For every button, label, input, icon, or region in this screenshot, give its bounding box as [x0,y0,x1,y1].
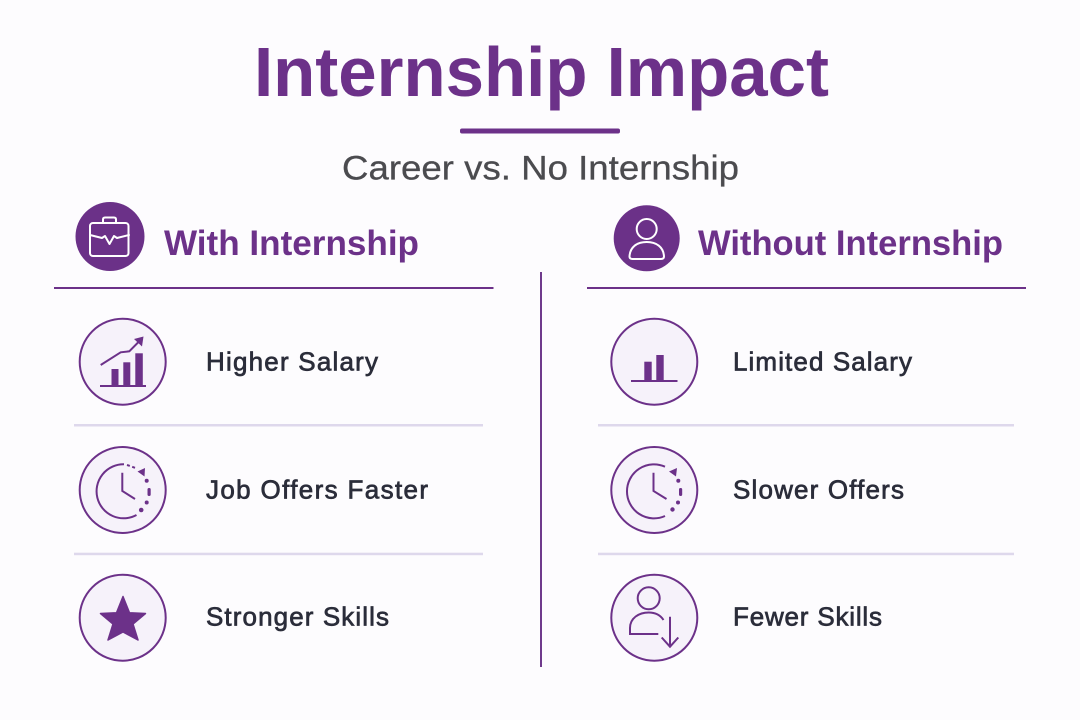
icon: briefcase [76,202,144,271]
label: slower offers: Slower Offers [733,474,904,504]
panel: with internship [54,202,494,661]
row: higher salary [80,319,378,405]
label: job offers faster: Job Offers Faster [206,474,428,504]
row: job offers faster [80,447,428,533]
row: limited salary [611,319,912,405]
icon: clock with dotted arrow [80,447,166,533]
row: stronger skills [80,575,389,661]
icon: star [80,575,166,661]
centre divider [540,272,542,667]
heading: without internship: Without Internship [698,224,1003,263]
label: limited salary: Limited Salary [733,346,912,376]
subtitle: Career vs. No Internship [342,150,739,188]
icon: person [614,205,680,271]
heading rule [54,287,494,289]
title: Internship Impact [254,33,829,111]
icon: small bar chart [611,319,697,405]
row: fewer skills [611,575,882,661]
heading: with internship: With Internship [164,224,419,263]
label: higher salary: Higher Salary [206,346,378,376]
panel: without internship [587,205,1026,661]
icon: person with down arrow [611,575,697,661]
label: stronger skills: Stronger Skills [206,602,389,632]
title underline [460,128,620,134]
icon: clock with dotted arrow [611,447,697,533]
heading rule [587,287,1026,289]
row: slower offers [611,447,904,533]
label: fewer skills: Fewer Skills [733,602,882,632]
icon: rising bar chart [80,319,166,405]
